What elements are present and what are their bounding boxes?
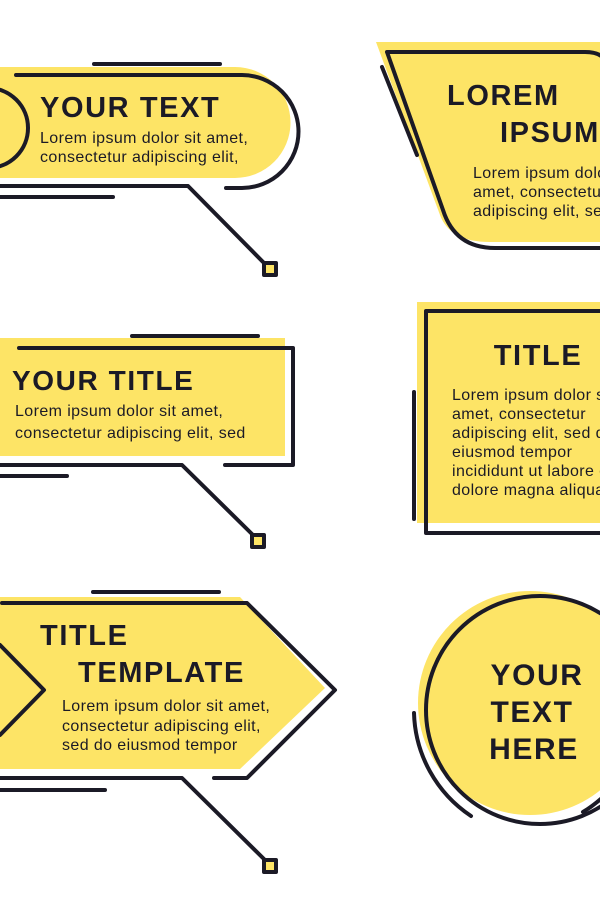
panel: your text (0, 64, 298, 275)
panel: title box: amet, consectetur (452, 406, 586, 423)
panel: lorem ipsum: LOREM (447, 80, 560, 112)
panel: your text: Lorem ipsum dolor sit amet, (40, 130, 248, 147)
panel: title box: TITLE (494, 340, 582, 372)
panel: title template: TITLE (40, 620, 129, 652)
panel: your text: YOUR TEXT (40, 92, 220, 124)
panel: lorem ipsum (376, 42, 600, 248)
panel: title template (0, 592, 335, 872)
panel: your title: YOUR TITLE (12, 365, 194, 396)
panel: your title: consectetur adipiscing elit, sed (15, 425, 246, 442)
panel: your title (0, 336, 293, 547)
panel: circle: TEXT (490, 696, 574, 729)
panel: circle (414, 591, 600, 824)
panel: title template: Lorem ipsum dolor sit amet, (62, 698, 270, 715)
panel: title template: consectetur adipiscing elit, (62, 718, 261, 735)
panel: circle: YOUR (490, 659, 584, 692)
panel: title box: eiusmod tempor (452, 444, 573, 461)
panel: circle: HERE (489, 733, 579, 766)
panel: title template: TEMPLATE (78, 657, 245, 689)
panel: your title: Lorem ipsum dolor sit amet, (15, 403, 223, 420)
panel: title template: sed do eiusmod tempor (62, 737, 238, 754)
panel: your text: consectetur adipiscing elit, (40, 149, 239, 166)
panel: lorem ipsum: IPSUM (500, 117, 600, 149)
panel: title box (414, 302, 600, 533)
